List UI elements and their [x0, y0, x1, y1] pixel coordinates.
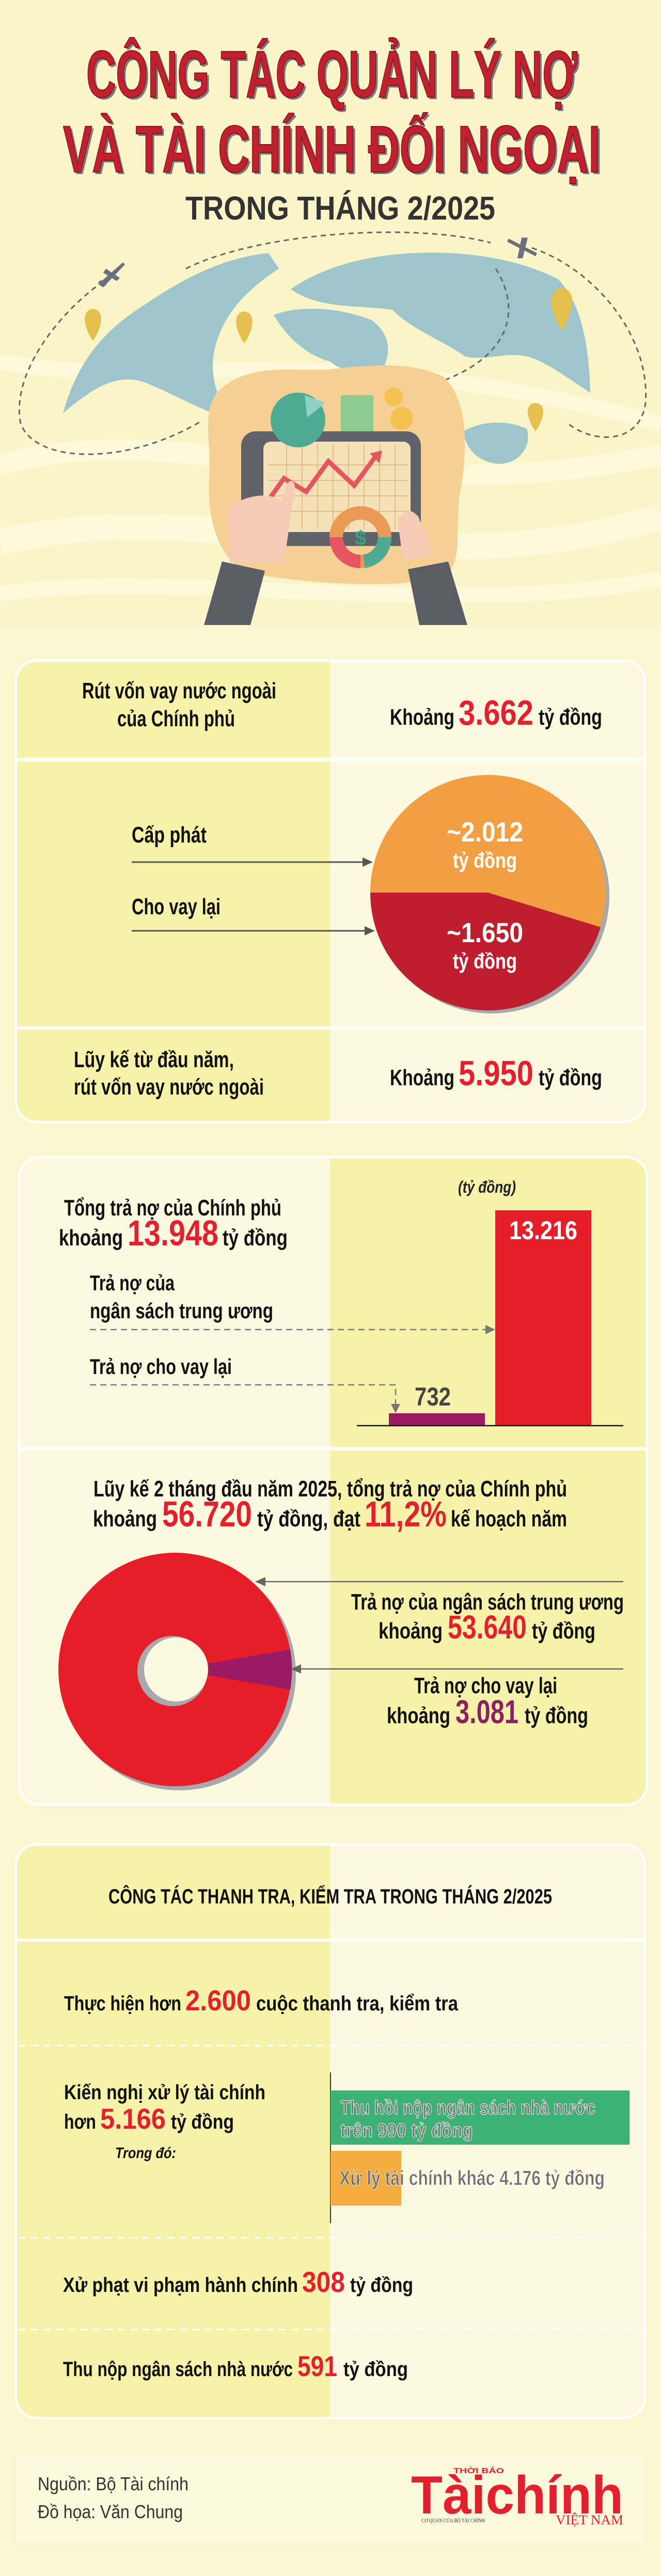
- row3 value: [390, 1054, 602, 1093]
- financial recommendations: hơn: [64, 2111, 96, 2133]
- administrative fines: tỷ đồng: [350, 2274, 413, 2297]
- inspections count: 2.600: [185, 1984, 251, 2017]
- cumulative text: 11,2%: [365, 1494, 447, 1534]
- label: cho vay lại: [132, 894, 375, 935]
- cumulative text: tỷ đồng, đạt: [257, 1506, 360, 1532]
- administrative fines: 308: [302, 2266, 345, 2298]
- label: central budget: Trả nợ của: [90, 1271, 175, 1295]
- panel: inspection: [16, 1845, 645, 2418]
- label: cấp phát: [132, 822, 373, 867]
- label: cho vay lại: Cho vay lại: [132, 894, 221, 919]
- callout central budget: [351, 1589, 624, 1646]
- blob: [208, 365, 465, 584]
- row3 value: 5.950: [459, 1054, 533, 1093]
- map: africa: [274, 309, 388, 380]
- label: central budget: ngân sách trung ương: [90, 1299, 273, 1323]
- pie chart: tỷ đồng: [453, 949, 517, 973]
- inspections count: [64, 1984, 459, 2017]
- logo: Tàichính: [411, 2465, 623, 2525]
- total repayment text: Tổng trả nợ của Chính phủ: [64, 1195, 281, 1221]
- donut icon: [336, 513, 385, 561]
- map: eurasia: [291, 253, 590, 393]
- financial recommendations: [64, 2081, 265, 2162]
- budget collection: 591: [297, 2350, 337, 2382]
- budget collection: Thu nộp ngân sách nhà nước: [63, 2358, 293, 2381]
- cumulative text: kế hoạch năm: [451, 1506, 567, 1532]
- row1 value: 3.662: [459, 693, 533, 732]
- flight dashes: [19, 282, 201, 454]
- administrative fines: [63, 2266, 413, 2298]
- breakdown bars: [330, 2072, 629, 2223]
- row3 label: [74, 1047, 264, 1100]
- row1 value: tỷ đồng: [539, 705, 602, 730]
- row1 label: [82, 678, 276, 731]
- logo: CƠ QUAN CỦA BỘ TÀI CHÍNH: [421, 2518, 485, 2524]
- source credits: [38, 2473, 188, 2522]
- total repayment text: 13.948: [128, 1213, 218, 1253]
- label: cấp phát: Cấp phát: [132, 822, 207, 848]
- breakdown bars: trên 990 tỷ đồng: [340, 2120, 473, 2142]
- panel: foreign loan withdrawals: [16, 661, 645, 1122]
- callout on-lending: 3.081: [455, 1693, 518, 1730]
- callout on-lending: tỷ đồng: [525, 1703, 588, 1728]
- pie chart: ~1.650: [447, 917, 523, 948]
- arrow to purple: [291, 1664, 623, 1674]
- bar chart: (tỷ đồng): [458, 1178, 516, 1196]
- bar chart: 732: [415, 1382, 451, 1411]
- pins: [85, 309, 101, 341]
- hands: [227, 481, 295, 563]
- callout central budget: tỷ đồng: [532, 1618, 595, 1644]
- bar chart: 13.216: [509, 1216, 577, 1245]
- donut chart: [58, 1553, 296, 1790]
- total repayment text: tỷ đồng: [223, 1225, 288, 1251]
- title: [63, 37, 603, 189]
- budget collection: tỷ đồng: [343, 2358, 408, 2381]
- source credits: Đồ họa: Văn Chung: [38, 2501, 183, 2522]
- row3 label: Lũy kế từ đầu năm,: [74, 1047, 234, 1072]
- total repayment text: khoảng: [59, 1225, 123, 1251]
- map: north america: [63, 253, 279, 421]
- arrow to red: [255, 1577, 623, 1586]
- bar chart: [357, 1178, 623, 1426]
- callout on-lending: Trả nợ cho vay lại: [414, 1673, 557, 1698]
- financial recommendations: Trong đó:: [115, 2145, 176, 2162]
- row1 label: Rút vốn vay nước ngoài: [82, 678, 276, 704]
- logo: THỜI BÁO: [453, 2466, 504, 2475]
- row3 value: Khoảng: [390, 1065, 454, 1090]
- pie chart: tỷ đồng: [453, 848, 517, 872]
- budget collection: [63, 2350, 408, 2382]
- planes: [98, 238, 537, 287]
- financial recommendations: tỷ đồng: [171, 2111, 234, 2133]
- pie chart: ~2.012: [447, 817, 523, 848]
- total repayment text: [59, 1195, 288, 1253]
- callout on-lending: [387, 1673, 588, 1730]
- footer: [16, 2455, 645, 2542]
- pie chart: [370, 775, 609, 1013]
- label: central budget: [90, 1271, 495, 1334]
- callout on-lending: khoảng: [387, 1703, 450, 1728]
- callout central budget: khoảng: [379, 1618, 443, 1644]
- inspections count: Thực hiện hơn: [64, 1992, 181, 2015]
- callout central budget: 53.640: [448, 1609, 527, 1646]
- row3 label: rút vốn vay nước ngoài: [74, 1074, 264, 1100]
- cumulative text: [93, 1476, 567, 1534]
- coins: [384, 387, 403, 406]
- panel: debt repayment: [19, 1157, 647, 1805]
- subtitle: TRONG THÁNG 2/2025: [185, 190, 495, 227]
- tablet: [241, 431, 421, 546]
- sleeves: [204, 561, 265, 625]
- money note: [341, 395, 373, 434]
- logo: VIỆT NAM: [556, 2512, 623, 2527]
- financial recommendations: 5.166: [100, 2102, 166, 2135]
- source credits: Nguồn: Bộ Tài chính: [38, 2473, 188, 2494]
- pie icon: [271, 393, 325, 447]
- header illustration: $: [355, 527, 366, 550]
- financial recommendations: Kiến nghị xử lý tài chính: [64, 2081, 265, 2104]
- row3 value: tỷ đồng: [539, 1065, 602, 1090]
- label: on-lending: [90, 1354, 400, 1413]
- map: australia: [464, 423, 528, 464]
- label: on-lending: Trả nợ cho vay lại: [90, 1354, 232, 1379]
- cumulative text: 56.720: [162, 1494, 252, 1534]
- breakdown bars: Thu hồi nộp ngân sách nhà nước: [340, 2097, 595, 2119]
- row1 value: [390, 693, 602, 732]
- administrative fines: Xử phạt vi phạm hành chính: [63, 2274, 298, 2297]
- cumulative text: khoảng: [93, 1506, 157, 1532]
- row1 label: của Chính phủ: [117, 706, 235, 731]
- inspections count: cuộc thanh tra, kiểm tra: [256, 1992, 459, 2015]
- header illustration: [0, 232, 661, 625]
- row1 value: Khoảng: [390, 705, 454, 730]
